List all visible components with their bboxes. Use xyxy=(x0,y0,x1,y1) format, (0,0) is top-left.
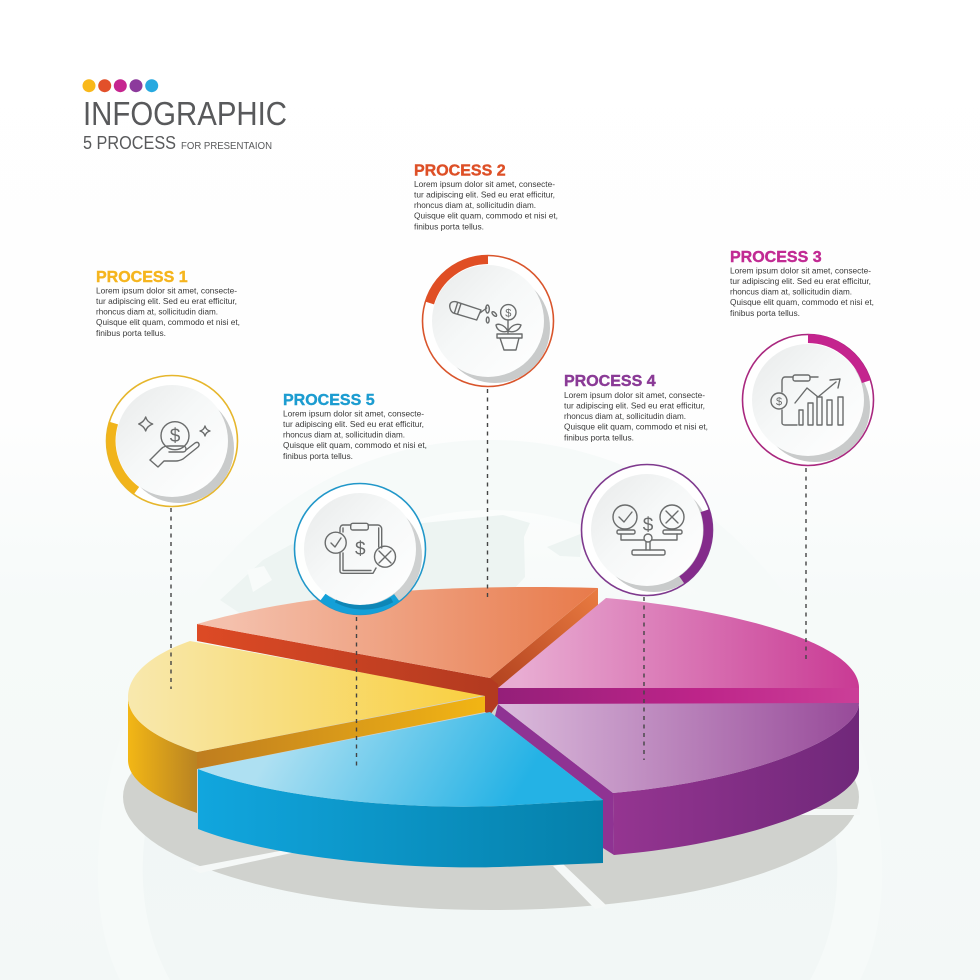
text block: process 1: tur adipiscing elit. Sed eu erat efficitur, xyxy=(96,296,237,306)
icon: hand holding coin: $ xyxy=(170,426,181,447)
text block: process 1 xyxy=(96,269,240,338)
text block: process 5 xyxy=(283,392,427,461)
text block: process 1: rhoncus diam at, sollicitudin diam. xyxy=(96,306,218,316)
text block: process 2: Quisque elit quam, commodo et nisi et, xyxy=(414,210,558,220)
text block: process 2: tur adipiscing elit. Sed eu erat efficitur, xyxy=(414,190,555,200)
text block: process 4: PROCESS 4 xyxy=(564,373,656,390)
title block xyxy=(82,79,287,153)
badge: process 2 xyxy=(422,256,554,386)
text block: process 2: PROCESS 2 xyxy=(414,163,506,180)
badge: process 5 xyxy=(294,484,426,614)
globe background xyxy=(143,510,837,980)
text block: process 3: Lorem ipsum dolor sit amet, consecte- xyxy=(730,266,871,276)
badge: process 3 xyxy=(742,334,874,466)
leader line: process 3 xyxy=(805,468,807,660)
text block: process 2: Lorem ipsum dolor sit amet, consecte- xyxy=(414,179,555,189)
text block: process 4: Lorem ipsum dolor sit amet, consecte- xyxy=(564,390,705,400)
text block: process 3: Quisque elit quam, commodo et nisi et, xyxy=(730,297,874,307)
leader line: process 1 xyxy=(170,508,172,689)
text block: process 2 xyxy=(414,163,558,232)
text block: process 5: tur adipiscing elit. Sed eu erat efficitur, xyxy=(283,419,424,429)
icon: chart on clipboard: $ xyxy=(776,396,782,408)
text block: process 3: PROCESS 3 xyxy=(730,249,822,266)
leader line: process 4 xyxy=(643,597,645,760)
text block: process 1: Quisque elit quam, commodo et nisi et, xyxy=(96,317,240,327)
badge: process 4 xyxy=(582,464,712,596)
text block: process 1: Lorem ipsum dolor sit amet, consecte- xyxy=(96,286,237,296)
text block: process 4: Quisque elit quam, commodo et nisi et, xyxy=(564,422,708,432)
text block: process 3: rhoncus diam at, sollicitudin diam. xyxy=(730,286,852,296)
text block: process 3: tur adipiscing elit. Sed eu erat efficitur, xyxy=(730,276,871,286)
subtitle small: FOR PRESENTAION xyxy=(181,141,272,152)
text block: process 3: finibus porta tellus. xyxy=(730,308,800,318)
colour dots xyxy=(82,79,158,92)
text block: process 4: tur adipiscing elit. Sed eu erat efficitur, xyxy=(564,400,705,410)
icon: watering can and money plant: $ xyxy=(505,307,511,319)
leader line: process 2 xyxy=(486,389,488,598)
subtitle: 5 PROCESS xyxy=(83,132,176,153)
text block: process 5: PROCESS 5 xyxy=(283,392,375,409)
text block: process 2: finibus porta tellus. xyxy=(414,222,484,232)
text block: process 4: finibus porta tellus. xyxy=(564,432,634,442)
text block: process 5: rhoncus diam at, sollicitudin diam. xyxy=(283,430,405,440)
pie slice: process 2 orange xyxy=(197,587,598,715)
text block: process 3 xyxy=(730,249,874,318)
ground shadow of pie xyxy=(123,684,860,910)
icon: balance scale with check and cross: $ xyxy=(643,515,654,536)
text block: process 1: finibus porta tellus. xyxy=(96,328,166,338)
pie slice: process 1 yellow xyxy=(128,641,485,813)
leader line: process 5 xyxy=(356,617,358,770)
title: INFOGRAPHIC xyxy=(83,95,287,132)
pie slice: process 5 blue xyxy=(198,712,603,867)
text block: process 1: PROCESS 1 xyxy=(96,269,188,286)
pie slice: process 4 purple xyxy=(495,703,859,855)
text block: process 5: Quisque elit quam, commodo et nisi et, xyxy=(283,440,427,450)
icon: clipboard with check and cross: $ xyxy=(355,539,366,560)
text block: process 4: rhoncus diam at, sollicitudin diam. xyxy=(564,411,686,421)
text block: process 2: rhoncus diam at, sollicitudin diam. xyxy=(414,200,536,210)
pie slice: process 3 magenta xyxy=(498,598,859,704)
text block: process 4 xyxy=(564,373,708,442)
badge: process 1 xyxy=(106,376,238,506)
text block: process 5: Lorem ipsum dolor sit amet, consecte- xyxy=(283,408,424,418)
text block: process 5: finibus porta tellus. xyxy=(283,451,353,461)
